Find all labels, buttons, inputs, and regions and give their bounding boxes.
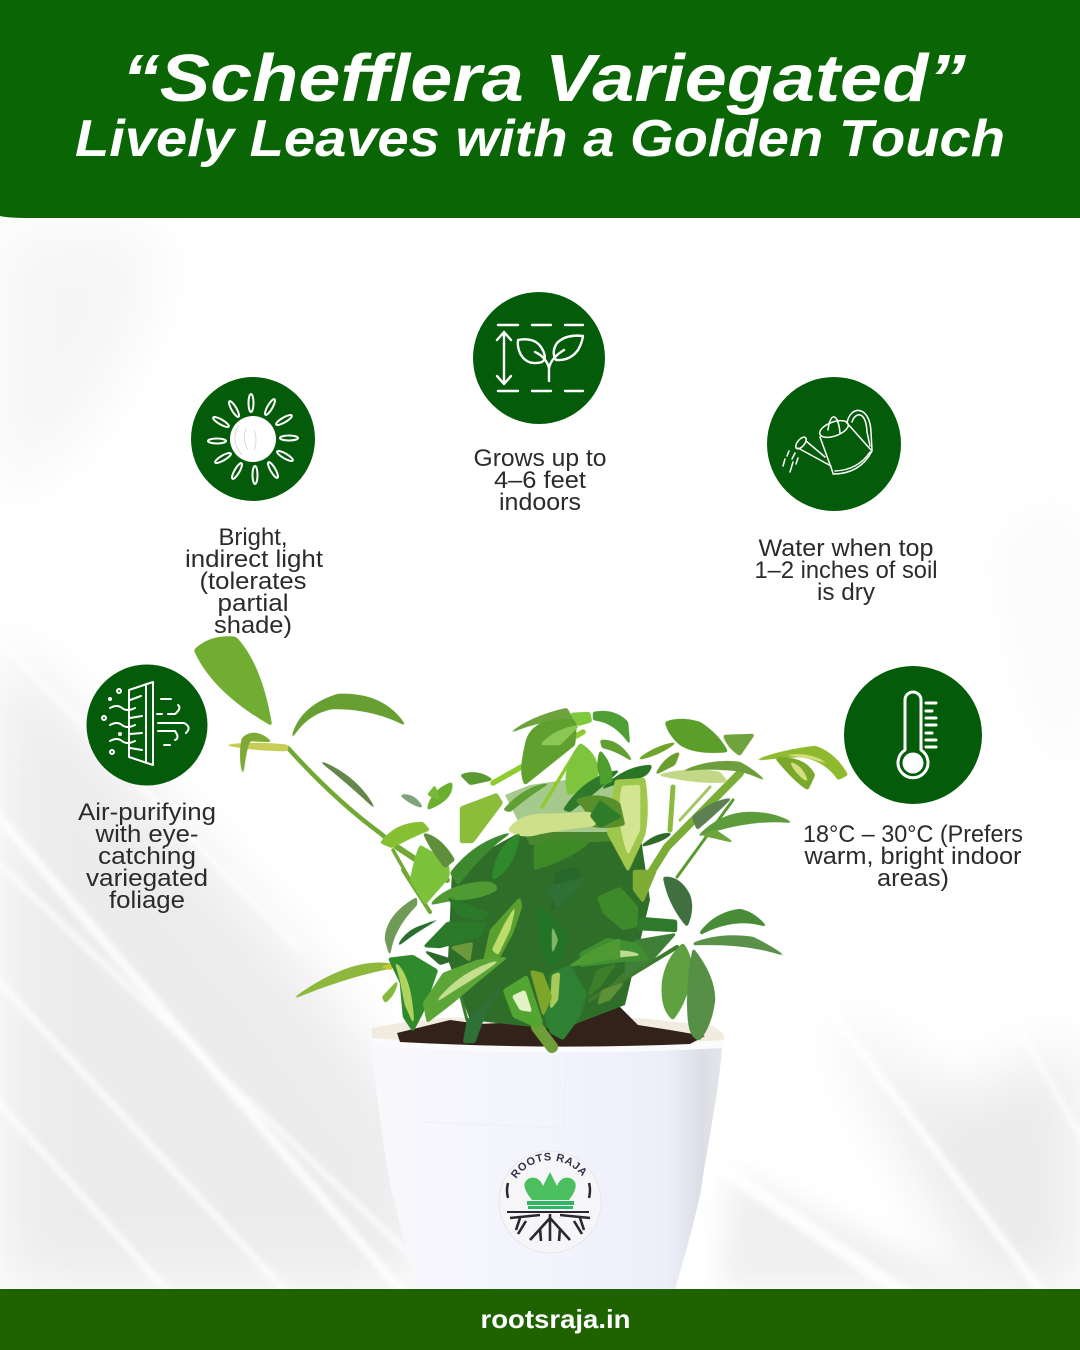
feature: light (185, 377, 323, 639)
soil (397, 1005, 705, 1047)
icon: air filter (86, 664, 208, 786)
sticker crown (524, 1172, 576, 1209)
text: watering (754, 535, 938, 606)
stems (288, 732, 740, 1047)
text: light: partial (218, 590, 288, 617)
text: temperature (803, 821, 1023, 892)
pot (370, 1017, 724, 1289)
middle leaves (385, 833, 677, 968)
sticker brand text: ROOTS RAJA (510, 1152, 586, 1178)
feature: temperature (803, 666, 1023, 892)
text: air purifying: variegated (86, 865, 208, 892)
header banner (0, 0, 1080, 218)
text: air purifying (78, 799, 216, 914)
text: air purifying: with eye- (94, 821, 198, 848)
left-centre small leaves (380, 772, 550, 905)
lower left leaves (291, 938, 620, 1043)
website: rootsraja.in (480, 1304, 630, 1334)
feature: height (473, 292, 606, 516)
text: air purifying: catching (98, 843, 196, 870)
upper left sprig leaves (194, 637, 406, 810)
text: watering: is dry (817, 579, 875, 606)
text: light (185, 524, 323, 639)
feature: air purifying (78, 664, 216, 914)
sticker roots (507, 1183, 590, 1241)
text: height: indoors (499, 489, 581, 516)
text: height (474, 445, 606, 516)
text: air purifying: Air-purifying (78, 799, 216, 826)
icon: watering can (767, 377, 901, 511)
text: light: Bright, (218, 524, 288, 551)
icon: thermometer (844, 666, 982, 804)
text: height: Grows up to (474, 445, 606, 472)
text: light: (tolerates (200, 568, 306, 595)
footer bar (0, 1289, 1080, 1350)
text: height: 4–6 feet (494, 467, 586, 494)
text: temperature: 18°C – 30°C (Prefers (803, 821, 1023, 848)
text: temperature: areas) (877, 865, 949, 892)
title: “Schefflera Variegated” (122, 41, 967, 116)
text: watering: 1–2 inches of soil (754, 557, 938, 584)
inner foliage shadow (448, 775, 650, 1030)
lower right leaves (580, 877, 787, 1040)
top cluster leaves (507, 708, 680, 872)
text: temperature: warm, bright indoor (803, 843, 1022, 870)
feature: watering (754, 377, 938, 606)
right branch leaves (640, 719, 848, 847)
icon: sun (191, 377, 315, 501)
text: light: indirect light (185, 546, 323, 573)
icon: height and sprout (473, 292, 605, 424)
plant: potted schefflera (194, 637, 848, 1289)
sticker: Roots Raja logo (498, 1150, 602, 1254)
text: light: shade) (214, 612, 292, 639)
text: air purifying: foliage (109, 887, 185, 914)
subtitle: Lively Leaves with a Golden Touch (75, 110, 1005, 168)
text: watering: Water when top (758, 535, 934, 562)
